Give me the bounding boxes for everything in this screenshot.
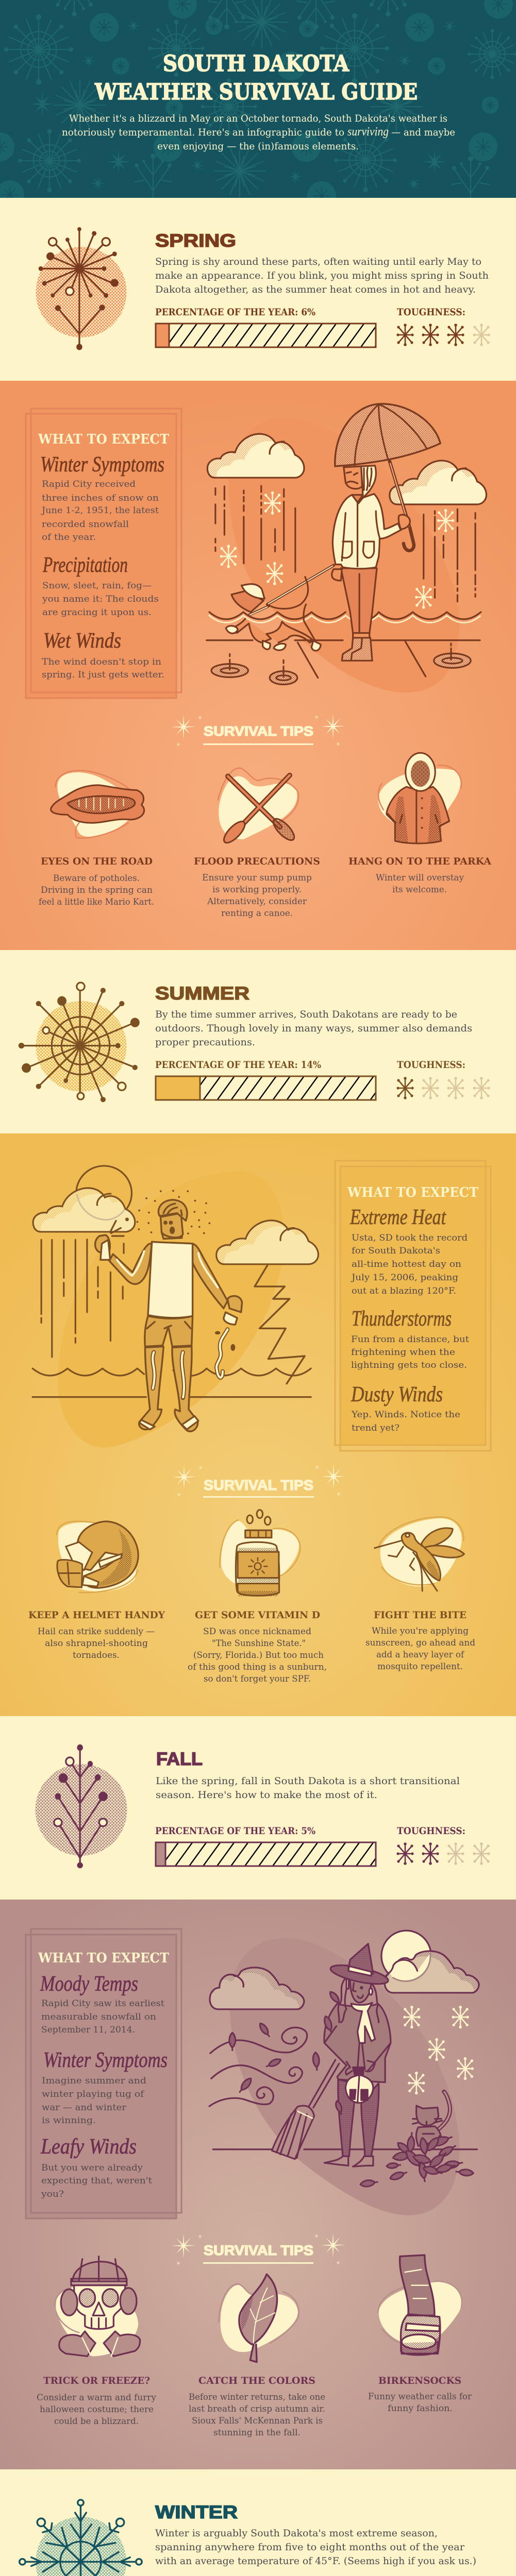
tip text: could be a blizzard.	[54, 2416, 139, 2427]
tip text: SD was once nicknamed	[203, 1626, 311, 1637]
expectation: extreme heat	[349, 1206, 468, 1296]
right cloud	[389, 460, 488, 505]
expectation: moody temps: Moody Temps	[40, 1972, 138, 1996]
tip text: Funny weather calls for	[368, 2392, 472, 2402]
expectation: wet winds	[42, 629, 164, 680]
panel: summer details	[0, 1133, 516, 1716]
expectation: thunderstorms: frightening when the	[351, 1347, 455, 1358]
title: WEATHER SURVIVAL GUIDE	[94, 79, 418, 105]
expectation: extreme heat: for South Dakota's	[352, 1246, 440, 1256]
label: percentage of the year: PERCENTAGE OF THE YEAR: 6%	[155, 307, 315, 318]
right cloud	[215, 1219, 320, 1265]
intro text	[62, 113, 455, 152]
label: percentage of the year: PERCENTAGE OF THE YEAR: 14%	[155, 1059, 321, 1071]
tip text: its welcome.	[392, 885, 447, 895]
heading: spring: SPRING	[155, 231, 236, 251]
survival tips heading: SURVIVAL TIPS	[204, 1477, 313, 1493]
expectation: thunderstorms: Thunderstorms	[352, 1307, 452, 1331]
tip text: Consider a warm and furry	[37, 2393, 156, 2403]
bar: 14 percent	[156, 1076, 376, 1100]
heading: fall: FALL	[156, 1749, 203, 1769]
icon: mosquito	[375, 1517, 464, 1591]
expectation: wet winds: Wet Winds	[43, 629, 121, 653]
tip text: Before winter returns, take one	[189, 2392, 325, 2402]
tip text	[188, 1626, 327, 1684]
tip text: Driving in the spring can	[41, 885, 153, 895]
icon: pothole	[51, 770, 144, 838]
snowflakes	[220, 492, 454, 609]
expectation: moody temps	[40, 1972, 164, 2035]
illustration: witch sweeping leaves	[205, 1930, 479, 2215]
illustration: woman walking dog in rain	[207, 404, 495, 692]
panel: spring details	[0, 381, 516, 950]
box heading: WHAT TO EXPECT	[38, 1951, 170, 1966]
waves	[209, 616, 481, 623]
expectation: winter symptoms: Imagine summer and	[42, 2076, 146, 2086]
panel: summer summary	[0, 950, 516, 1133]
icon: autumn leaf	[219, 2274, 299, 2362]
tip title: HANG ON TO THE PARKA	[348, 856, 491, 867]
expectation: winter symptoms: recorded snowfall	[42, 519, 129, 530]
sun	[76, 1166, 131, 1221]
tip text	[376, 873, 464, 895]
tip text: Sioux Falls' McKennan Park is	[192, 2416, 323, 2426]
icon: skull with hat and mittens	[55, 2257, 140, 2356]
tip text: last breath of crisp autumn air.	[189, 2404, 325, 2414]
expectation: leafy winds: expecting that, weren't	[41, 2176, 152, 2186]
man	[95, 1200, 242, 1431]
expectation: dusty winds: trend yet?	[352, 1423, 400, 1433]
tip text	[39, 873, 154, 907]
expectation: extreme heat: out at a blazing 120°F.	[352, 1286, 456, 1296]
tip text: funny fashion.	[388, 2403, 453, 2414]
leash	[268, 565, 334, 604]
expectation: precipitation: Precipitation	[42, 553, 128, 577]
title	[94, 51, 418, 105]
panel: winter summary	[0, 2469, 516, 2576]
left cloud	[32, 1187, 136, 1232]
fall description	[156, 1775, 460, 1801]
expectation: dusty winds	[351, 1383, 460, 1433]
tip title: TRICK OR FREEZE?	[43, 2375, 150, 2386]
expectation: winter symptoms: Rapid City received	[42, 479, 136, 489]
tip text: stunning in the fall.	[213, 2428, 301, 2438]
label: toughness: TOUGHNESS:	[397, 307, 465, 318]
rain	[41, 1240, 124, 1357]
intro text: notoriously temperamental. Here's an infographic guide to	[62, 127, 344, 138]
expectation: precipitation: you name it: The clouds	[42, 594, 159, 604]
summer description: outdoors. Though lovely in many ways, summer also demands	[155, 1023, 472, 1034]
expectation: precipitation: Snow, sleet, rain, fog—	[42, 581, 152, 591]
tip text: Winter will overstay	[376, 873, 464, 883]
icon: sock and sandal	[378, 2255, 462, 2355]
survival tips heading	[172, 1464, 346, 1498]
expectation: winter symptoms: three inches of snow on	[42, 493, 159, 503]
tip text: feel a little like Mario Kart.	[39, 897, 154, 907]
ground	[32, 1396, 311, 1398]
tip: get some vitamin d	[188, 1510, 327, 1684]
expectation: winter symptoms: June 1-2, 1951, the latest	[41, 505, 159, 516]
tip title: BIRKENSOCKS	[378, 2375, 461, 2386]
tip: birkensocks	[368, 2255, 472, 2414]
expectation: extreme heat: all-time hottest day on	[352, 1259, 461, 1269]
intro text: even enjoying — the (in)famous elements.	[157, 141, 359, 152]
bar: 6 percent	[156, 324, 376, 347]
tip: trick or freeze	[37, 2257, 156, 2427]
expectation: leafy winds: Leafy Winds	[40, 2135, 137, 2159]
label: toughness: TOUGHNESS:	[397, 1825, 465, 1837]
expectation: winter symptoms: is winning.	[42, 2115, 96, 2126]
woman	[332, 466, 410, 660]
expectation: winter symptoms: of the year.	[42, 532, 96, 543]
expectation: thunderstorms: lightning gets too close.	[351, 1360, 467, 1370]
background snowflake pattern	[0, 0, 516, 210]
spring description: Dakota altogether, as the summer heat comes in hot and heavy.	[155, 284, 476, 295]
intro text: Whether it's a blizzard in May or an October tornado, South Dakota's weather is	[69, 113, 447, 124]
what to expect box	[335, 1161, 491, 1451]
tip title: KEEP A HELMET HANDY	[28, 1609, 165, 1621]
panel: spring summary	[0, 198, 516, 381]
panel: fall details	[0, 1900, 516, 2469]
icon: parka	[378, 753, 461, 843]
left cloud	[206, 433, 305, 479]
toughness stars: 1 of 4	[396, 1077, 490, 1099]
snowflakes	[403, 2006, 474, 2094]
rain	[215, 486, 475, 602]
tip text: tornadoes.	[73, 1650, 120, 1660]
tip text: sunscreen, go ahead and	[365, 1638, 475, 1648]
tip: hang on to the parka	[348, 753, 491, 895]
icon: spring flower	[36, 227, 127, 350]
sunburn patches	[117, 1251, 227, 1398]
intro text: surviving	[347, 125, 389, 139]
right cloud	[384, 1950, 480, 1994]
tip text: mosquito repellent.	[377, 1662, 463, 1672]
label: percentage of the year: PERCENTAGE OF THE YEAR: 5%	[155, 1825, 315, 1837]
tip text: Ensure your sump pump	[202, 873, 312, 883]
spring description	[155, 256, 489, 295]
expectation: extreme heat: Usta, SD took the record	[352, 1233, 468, 1243]
icon: vitamin bottle	[220, 1510, 301, 1596]
icon: crossed oars	[218, 768, 298, 846]
left cloud	[209, 1967, 305, 2010]
expectation: extreme heat: July 15, 2006, peaking	[351, 1273, 458, 1283]
expectation: winter symptoms: Winter Symptoms	[43, 2048, 168, 2072]
tip: eyes on the road	[39, 770, 154, 907]
summer description: By the time summer arrives, South Dakotans are ready to be	[155, 1009, 457, 1020]
survival tips heading	[171, 714, 345, 748]
title: SOUTH DAKOTA	[163, 51, 349, 77]
wind swirls	[209, 2027, 307, 2106]
tip text: renting a canoe.	[221, 908, 293, 919]
fall description: Like the spring, fall in South Dakota is a short transitional	[156, 1775, 460, 1787]
tip: flood precautions	[194, 768, 320, 919]
expectation: winter symptoms	[40, 453, 164, 543]
icon: summer sun	[19, 982, 140, 1102]
box heading: WHAT TO EXPECT	[347, 1185, 479, 1200]
witch	[324, 1944, 391, 2166]
cat	[413, 2092, 450, 2146]
label: toughness: TOUGHNESS:	[397, 1059, 465, 1071]
tip text	[38, 1626, 155, 1660]
summer description	[155, 1009, 472, 1048]
moon	[381, 1930, 431, 1981]
expectation: leafy winds: you?	[41, 2189, 64, 2199]
tip text: is working properly.	[212, 885, 302, 895]
box heading: WHAT TO EXPECT	[38, 432, 170, 447]
icon: fall branch	[35, 1744, 127, 1868]
tip text	[368, 2392, 472, 2414]
what to expect box	[26, 1929, 181, 2218]
tip title: EYES ON THE ROAD	[41, 856, 153, 867]
panel: fall summary	[0, 1716, 516, 1900]
intro text: — and maybe	[391, 127, 455, 138]
tip text: add a heavy layer of	[376, 1650, 465, 1660]
expectation: extreme heat: Extreme Heat	[349, 1206, 446, 1229]
tip: keep a helmet handy	[28, 1521, 165, 1660]
tip title: CATCH THE COLORS	[198, 2375, 315, 2386]
winter description: Winter is arguably South Dakota's most extreme season,	[155, 2528, 438, 2539]
umbrella	[335, 404, 440, 551]
tip text: (Sorry, Florida.) But too much	[193, 1650, 324, 1660]
expectation: precipitation	[42, 553, 159, 618]
spring description: make an appearance. If you blink, you might miss spring in South	[155, 270, 489, 281]
tip text	[202, 873, 312, 919]
tip text	[365, 1626, 475, 1672]
expectation: thunderstorms	[351, 1307, 469, 1370]
tip text: so don't forget your SPF.	[204, 1674, 311, 1684]
icon: snowflake	[20, 2500, 142, 2576]
illustration: man with sunburn	[32, 1166, 326, 1448]
toughness stars: 2 of 4	[396, 1842, 490, 1865]
tip text: "The Sunshine State."	[212, 1638, 306, 1649]
expectation: winter symptoms: winter playing tug of	[42, 2089, 145, 2099]
expectation: winter symptoms: war — and winter	[42, 2103, 127, 2113]
heading: summer: SUMMER	[155, 984, 249, 1004]
ground	[213, 2148, 477, 2150]
expectation: moody temps: measurable snowfall on	[41, 2012, 156, 2022]
tip title: FIGHT THE BITE	[374, 1609, 467, 1621]
expectation: precipitation: are gracing it upon us.	[42, 607, 152, 618]
expectation: winter symptoms	[42, 2048, 168, 2126]
broom	[272, 2032, 354, 2159]
sweat drops	[136, 1190, 235, 1351]
tip text: halloween costume; there	[40, 2404, 154, 2415]
spring description: Spring is shy around these parts, often waiting until early May to	[155, 256, 481, 267]
expectation: moody temps: September 11, 2014.	[41, 2025, 135, 2035]
expectation: thunderstorms: Fun from a distance, but	[351, 1334, 469, 1345]
tip text	[37, 2393, 156, 2427]
panel: header	[0, 0, 516, 210]
winter description: with an average temperature of 45°F. (Seems high if you ask us.)	[155, 2555, 476, 2567]
expectation: leafy winds	[40, 2135, 152, 2199]
expectation: wet winds: The wind doesn't stop in	[42, 657, 161, 667]
expectation: leafy winds: But you were already	[41, 2163, 143, 2173]
expectation: moody temps: Rapid City saw its earliest	[41, 1998, 164, 2009]
winter description: spanning anywhere from five to eight months out of the year	[155, 2541, 465, 2553]
expectation: winter symptoms: Winter Symptoms	[40, 453, 164, 477]
toughness stars: 3 of 4	[396, 324, 490, 346]
bar: 5 percent	[156, 1842, 376, 1866]
summer description: proper precautions.	[155, 1037, 255, 1048]
puddles	[211, 653, 471, 685]
tip: fight the bite	[365, 1517, 475, 1672]
tip text: also shrapnel-shooting	[45, 1638, 148, 1649]
tip text	[189, 2392, 325, 2438]
waves	[32, 1368, 311, 1377]
tip text: Beware of potholes.	[53, 873, 140, 884]
heading: winter: WINTER	[155, 2502, 238, 2522]
icon: football helmet	[57, 1521, 138, 1592]
winter description	[155, 2528, 476, 2567]
expectation: dusty winds: Dusty Winds	[351, 1383, 443, 1406]
survival tips heading	[171, 2233, 345, 2266]
survival tips heading: SURVIVAL TIPS	[204, 723, 313, 739]
tip text: While you're applying	[372, 1626, 469, 1636]
tip text: Alternatively, consider	[207, 896, 307, 907]
fall description: season. Here's how to make the most of it.	[156, 1789, 377, 1801]
dog	[226, 577, 321, 651]
ground and road	[207, 640, 480, 678]
expectation: wet winds: spring. It just gets wetter.	[42, 670, 164, 680]
tip text: of this good thing is a sunburn,	[188, 1662, 327, 1672]
expectation: dusty winds: Yep. Winds. Notice the	[351, 1410, 460, 1420]
tip text: Hail can strike suddenly —	[38, 1626, 155, 1637]
what to expect box	[26, 409, 181, 698]
survival tips heading: SURVIVAL TIPS	[204, 2243, 313, 2258]
tip title: FLOOD PRECAUTIONS	[194, 856, 320, 867]
tip title: GET SOME VITAMIN D	[195, 1609, 320, 1621]
tip: catch the colors	[189, 2274, 325, 2438]
lightning	[255, 1265, 305, 1384]
leaf pile	[229, 1990, 474, 2188]
